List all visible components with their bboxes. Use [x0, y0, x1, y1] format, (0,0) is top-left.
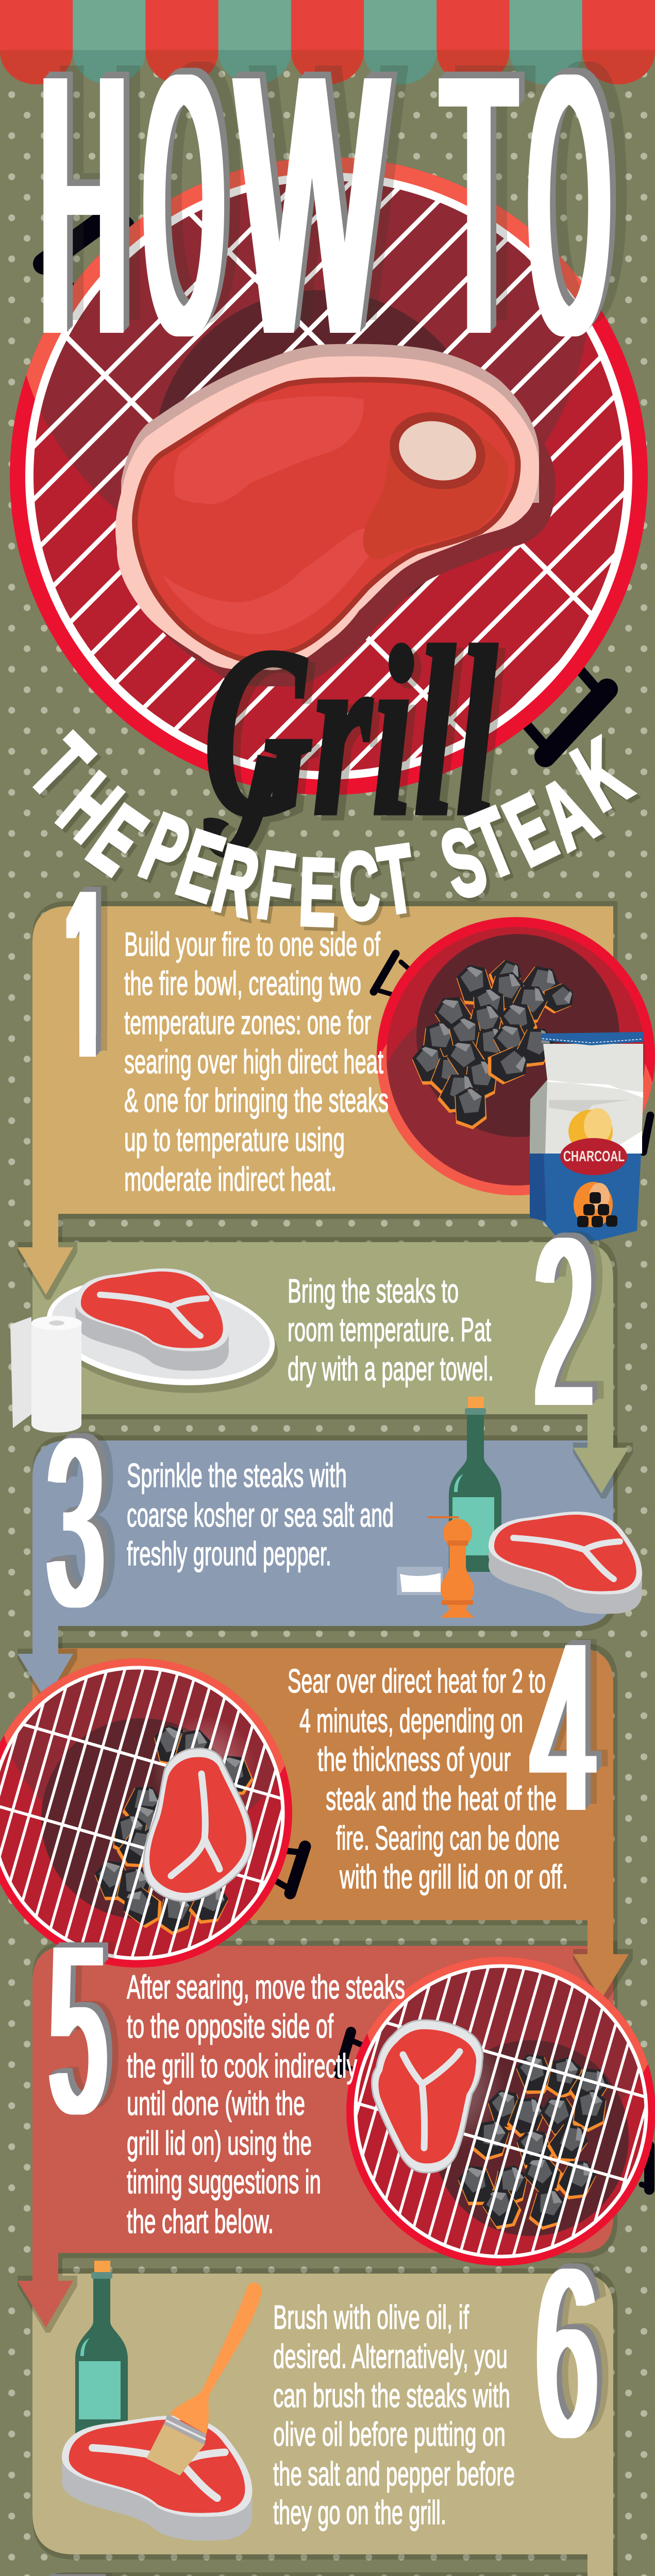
panel: step 6 with arrow: [32, 2274, 629, 2576]
icon: grill handles: [44, 196, 607, 756]
text: step 2: Bring the steaks to: [288, 1272, 459, 1310]
text: step 3: Sprinkle the steaks with: [127, 1456, 347, 1494]
text: step 4: [288, 1662, 568, 1895]
text: step 1: Build your fire to one side of: [124, 925, 381, 963]
icon: step 4 coals: [91, 1722, 257, 1939]
number 4: 4: [531, 1594, 595, 1861]
step 4 grill bowl: [0, 1543, 303, 1968]
title: HOW TO: [40, 0, 627, 392]
icon: paper towel: [10, 1316, 82, 1432]
icon: step 5 coals: [455, 2049, 615, 2235]
icon: step 1 grill handles: [374, 954, 650, 1152]
title: Grill: [204, 597, 498, 866]
number 1: 1: [63, 840, 110, 1108]
title: THE PERFECT STEAK: T: [373, 825, 421, 935]
step 4 grate: [0, 1628, 323, 1998]
title: THE PERFECT STEAK: E: [166, 810, 234, 923]
title: THE PERFECT STEAK: A: [524, 758, 612, 870]
icon: charcoal bag: [530, 1032, 643, 1241]
text: step 5: until done (with the: [127, 2084, 305, 2122]
step 5 heat zone: [392, 2025, 629, 2236]
text: step 6: [273, 2298, 515, 2531]
title: THE PERFECT STEAK: K: [558, 719, 645, 831]
icon: steak shadow: [159, 432, 556, 687]
title: THE PERFECT STEAK: E: [297, 839, 338, 946]
title: THE PERFECT STEAK: E: [72, 786, 163, 894]
text: step 6: can brush the steaks with: [273, 2377, 510, 2414]
grill hero illustration: [10, 158, 648, 795]
awning: [0, 0, 655, 84]
title: THE PERFECT STEAK: F: [251, 832, 300, 941]
icon: oil bottle: [449, 1397, 501, 1572]
icon: hero steak: [115, 344, 539, 670]
text: step 6: Brush with olive oil, if: [273, 2298, 469, 2336]
title: THE PERFECT STEAK: S: [430, 807, 498, 920]
number 2: 2: [534, 1189, 593, 1456]
step 4 heat zone: [41, 1716, 255, 1919]
icon: basting brush: [146, 2283, 262, 2476]
illustration: step 2 plate, steak and paper towel: [10, 1265, 285, 1432]
text: step 1: searing over high direct heat: [124, 1043, 383, 1080]
icon: salt cup: [397, 1567, 443, 1595]
illustration: step 5 indirect grill: [316, 1841, 655, 2296]
icon: seasoned steak: [489, 1512, 642, 1614]
title: THE PERFECT STEAK: E: [490, 774, 570, 886]
icon: step 5 steak: [372, 2020, 483, 2173]
text: step 6: the salt and pepper before: [273, 2455, 515, 2493]
text: step 5: After searing, move the steaks: [127, 1968, 405, 2006]
text: step 5: timing suggestions in: [127, 2163, 321, 2200]
text: step 1: moderate indirect heat.: [124, 1160, 337, 1198]
step numbers: [44, 840, 597, 2576]
panel: step 3 with arrow: [18, 1440, 613, 1700]
text: step 1: & one for bringing the steaks: [124, 1081, 389, 1119]
text: step 2: dry with a paper towel.: [288, 1350, 494, 1387]
grill bowl: [10, 158, 648, 795]
illustration: step 4 searing grill: [0, 1543, 323, 1998]
text: step 1: up to temperature using: [124, 1121, 345, 1158]
icon: olive oil bottle: [75, 2261, 128, 2436]
number 6: 6: [536, 2219, 597, 2487]
title: THE PERFECT STEAK: T: [457, 788, 528, 899]
icon: charcoal bag: CHARCOAL: [563, 1148, 625, 1165]
icon: step 5 handles: [339, 2032, 650, 2190]
illustration: step 6 oil and brush: [62, 2261, 262, 2540]
text: step 1: [124, 925, 389, 1198]
panel: step 5 with arrow: [18, 1946, 613, 2328]
number 5: 5: [49, 1895, 107, 2163]
text: step 5: to the opposite side of: [127, 2007, 334, 2045]
text: step 6: they go on the grill.: [273, 2494, 446, 2531]
icon: step 4 handle: [271, 1846, 305, 1893]
panel: step 2 with arrow: [32, 1242, 629, 1494]
text: step 6: desired. Alternatively, you: [273, 2337, 508, 2375]
text: step 6: olive oil before putting on: [273, 2415, 506, 2453]
illustration: step 1 charcoal grill: [370, 917, 655, 1241]
text: step 3: [127, 1456, 394, 1572]
text: step 5: [127, 1968, 405, 2240]
icon: steak being brushed: [62, 2416, 253, 2540]
title: THE PERFECT STEAK: T: [11, 717, 110, 816]
icon: pepper mill: [428, 1517, 474, 1618]
step 5 grill bowl: [346, 1841, 655, 2266]
title: THE PERFECT STEAK: [11, 717, 645, 946]
text: step 3: coarse kosher or sea salt and: [127, 1496, 394, 1534]
text: step 2: room temperature. Pat: [288, 1311, 491, 1348]
icon: steak: [75, 1268, 229, 1371]
icon: plate: [40, 1265, 285, 1406]
number 3: 3: [47, 1388, 104, 1656]
step 5 grate: [316, 1926, 655, 2296]
icon: step 4 steak: [144, 1749, 253, 1901]
text: step 5: the chart below.: [127, 2202, 274, 2240]
text: step 3: freshly ground pepper.: [127, 1535, 331, 1572]
text: step 2: [288, 1272, 494, 1387]
step 1 fire bowl: [377, 917, 655, 1195]
panel: step 1 with arrow: [18, 906, 613, 1295]
title: THE PERFECT STEAK: R: [204, 825, 268, 938]
illustration: step 3 seasoning and steak: [397, 1397, 642, 1618]
text: step 5: the grill to cook indirectly: [127, 2047, 357, 2084]
title: THE PERFECT STEAK: H: [40, 754, 139, 861]
panel: step 4 with arrow: [32, 1648, 629, 1999]
icon: step 1 coals: [409, 955, 578, 1129]
text: step 5: grill lid on) using the: [127, 2124, 312, 2162]
title: THE PERFECT STEAK: P: [128, 794, 202, 906]
title: THE PERFECT STEAK: C: [337, 833, 382, 940]
text: step 4: the thickness of your: [317, 1740, 511, 1778]
text: step 1: the fire bowl, creating two: [124, 964, 361, 1002]
text: step 1: temperature zones: one for: [124, 1004, 371, 1041]
